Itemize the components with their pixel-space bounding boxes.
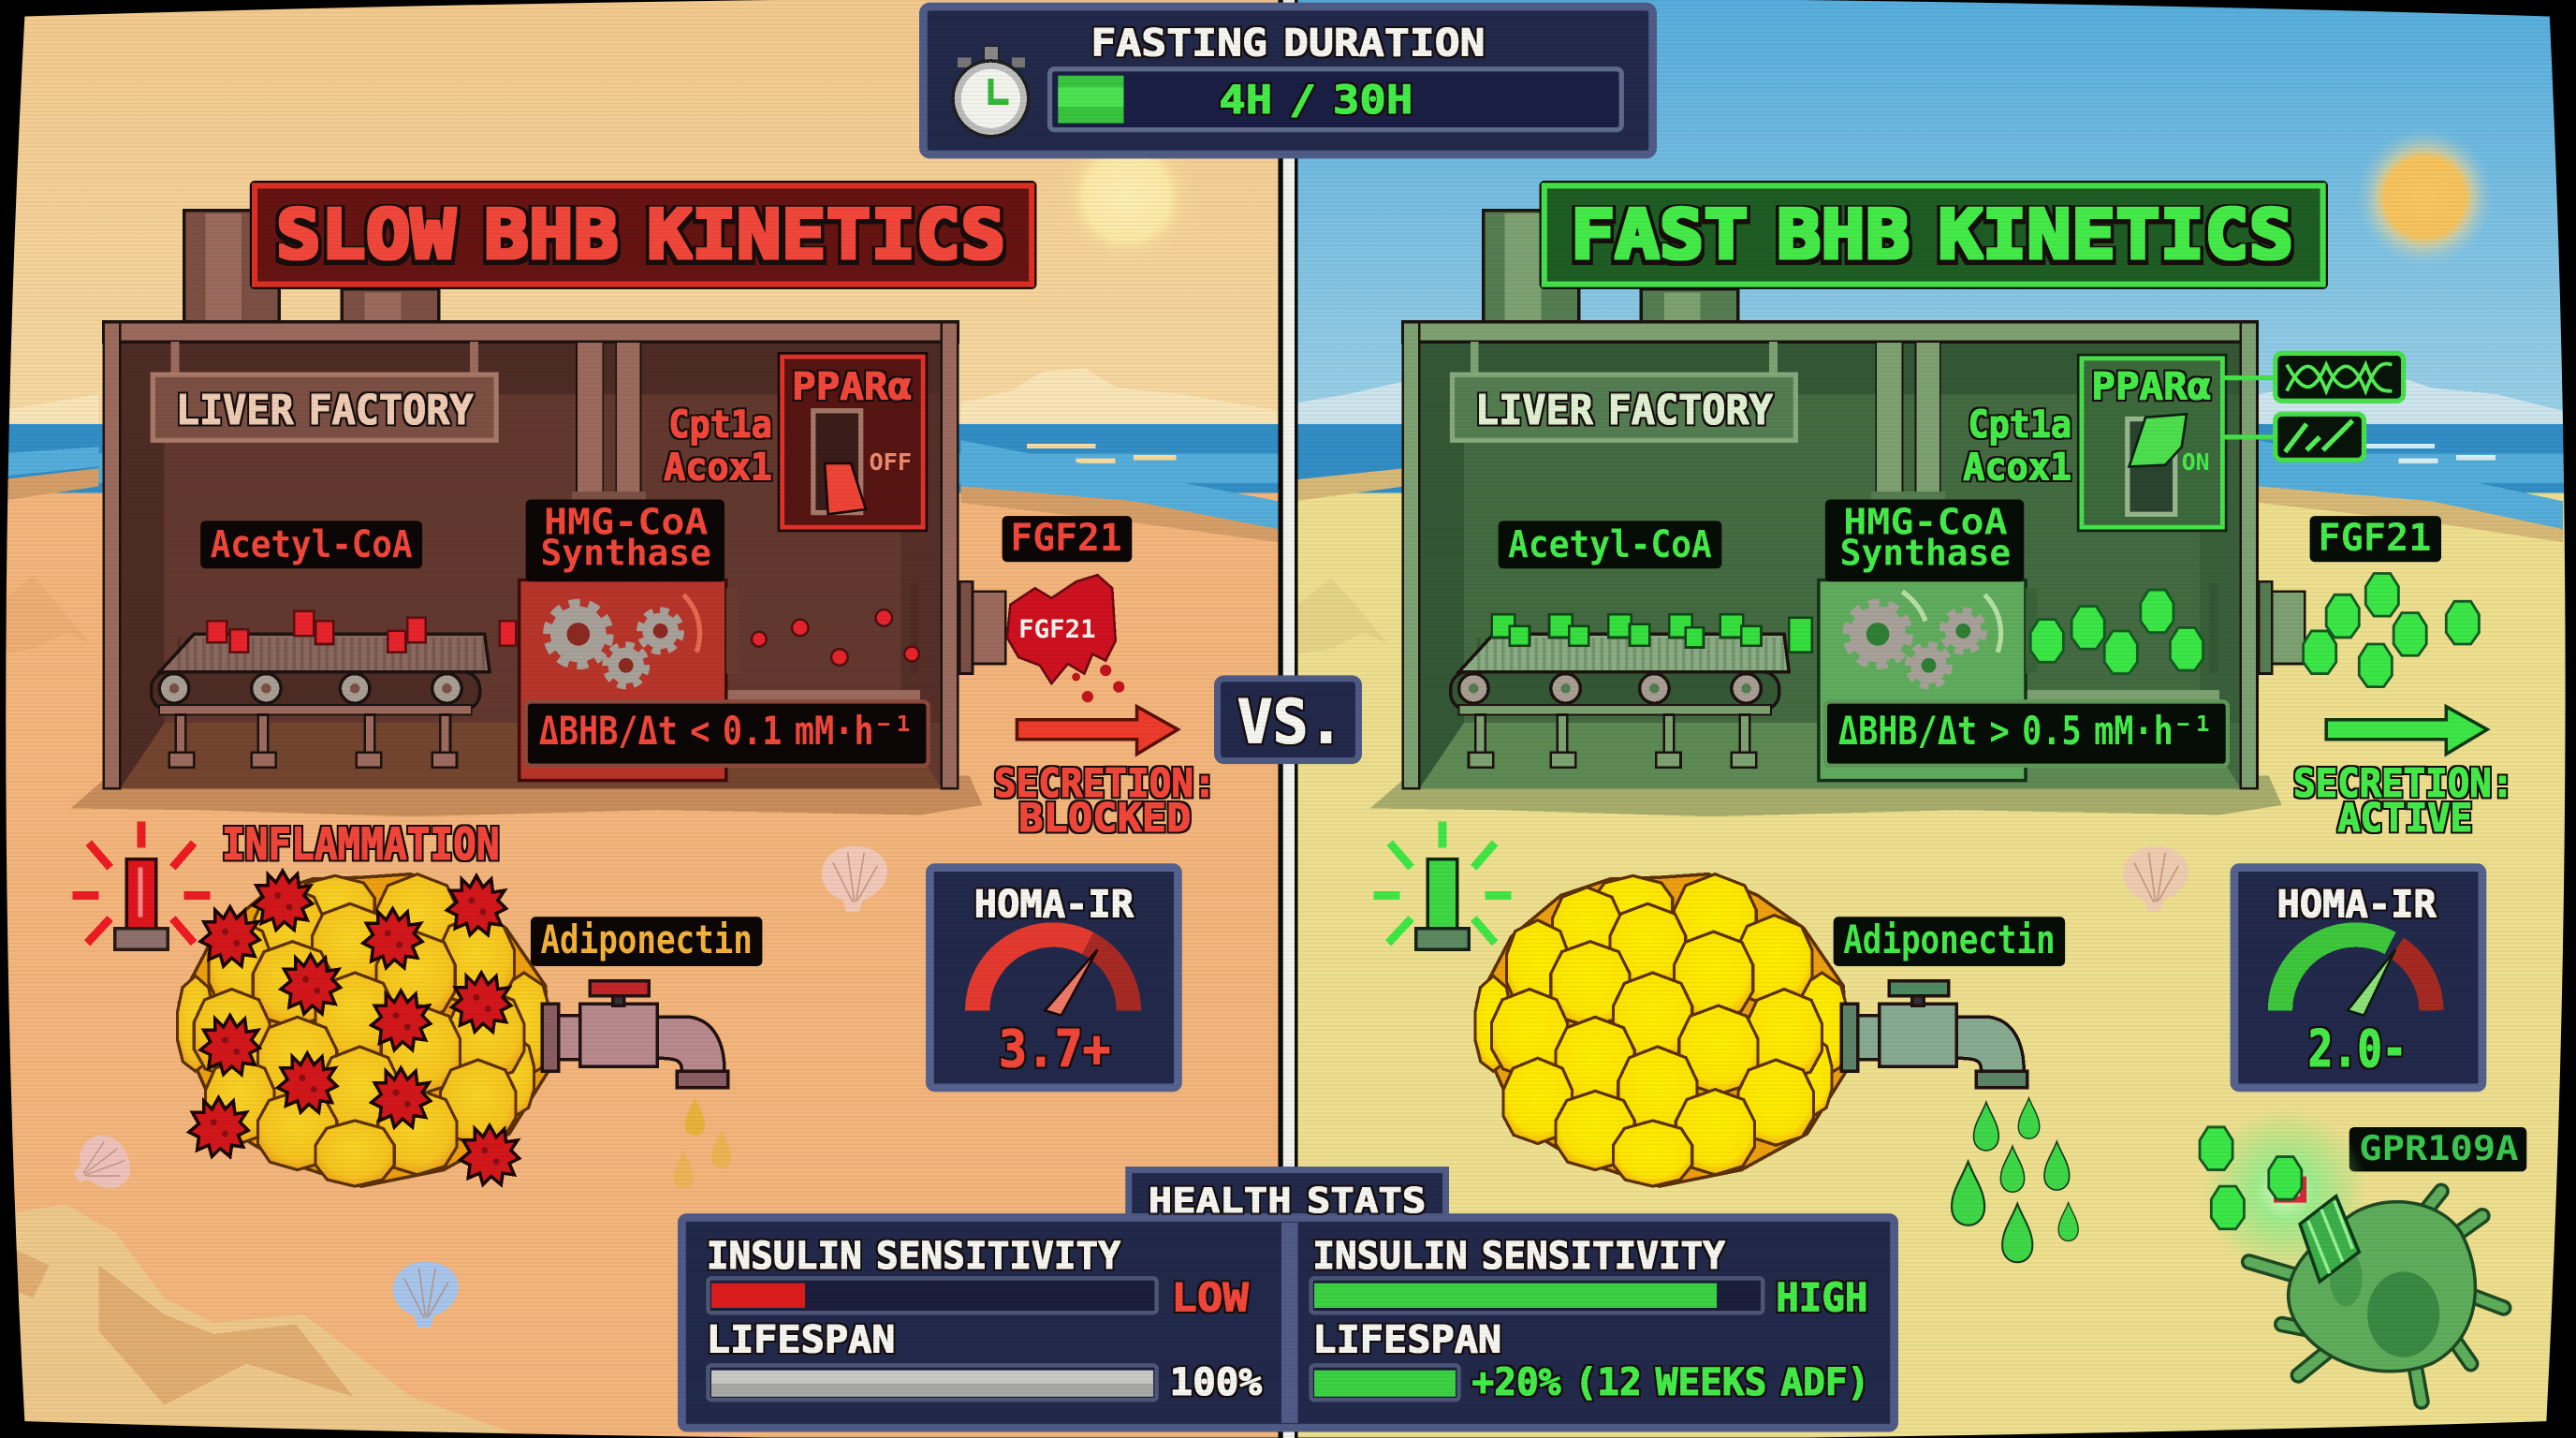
label: secretion active: ACTIVE: [2337, 795, 2472, 841]
stats: slow: 100%: [1170, 1360, 1263, 1404]
label: adiponectin left: Adiponectin: [540, 917, 753, 962]
switch: PPARα on: ON: [2182, 448, 2210, 476]
progress bar: 4H / 30H: [1219, 77, 1412, 123]
shells: [63, 846, 887, 1328]
droplets: blocked ketones: [752, 609, 919, 666]
machine: HMG-CoA synthase: [520, 500, 738, 781]
badge: trend arrows: [2224, 414, 2364, 460]
label: secretion active: [2293, 760, 2513, 841]
machine: HMG-CoA synthase: HMG-CoA: [544, 501, 708, 543]
drops: weak adiponectin: [674, 1097, 731, 1188]
switch: PPARα off: OFF: [869, 448, 912, 476]
sign: liver factory left: LIVER FACTORY: [176, 387, 474, 434]
stats: fast: +20% (12 WEEKS ADF): [1472, 1360, 1869, 1404]
cell: GPR109A immune cell: [2249, 1177, 2504, 1401]
label: adiponectin right: Adiponectin: [1843, 917, 2056, 962]
label: Cpt1a Acox1: Cpt1a: [668, 403, 772, 447]
label: Acetyl-CoA right: Acetyl-CoA: [1508, 522, 1712, 566]
fat cluster: healthy: [1475, 874, 1848, 1186]
splatter: blocked FGF21: FGF21: [1018, 616, 1096, 644]
label: secretion blocked: BLOCKED: [1018, 795, 1191, 841]
fat cluster: inflamed: [178, 871, 550, 1186]
machine: HMG-CoA synthase: Synthase: [540, 533, 711, 575]
acetyl-CoA cubes right: [1492, 614, 1812, 653]
tap: left: [542, 981, 728, 1088]
receptor: [2300, 1196, 2359, 1282]
label: secretion blocked: [994, 760, 1216, 841]
icon: stopwatch: [953, 46, 1029, 137]
label: inflammation: INFLAMMATION: [222, 819, 500, 871]
stats: fast: HIGH: [1776, 1275, 1868, 1321]
label: FGF21 right: FGF21: [2318, 516, 2431, 560]
pills: FGF21 released: [2304, 574, 2479, 687]
badge: DNA: [2224, 353, 2404, 401]
sign: liver factory left: [153, 374, 496, 440]
gauge panel: HOMA-IR right: HOMA-IR: [2277, 882, 2437, 926]
stats: fast: LIFESPAN: [1312, 1317, 1501, 1361]
panel: slow factory: [71, 211, 1005, 816]
label: Cpt1a Acox1: Acox1: [664, 445, 772, 489]
splatter: blocked FGF21: [1007, 575, 1124, 702]
pills: ketones flowing: [2030, 590, 2203, 674]
pills: BHB ligands: [2200, 1127, 2302, 1229]
stats: slow: INSULIN SENSITIVITY: [707, 1234, 1121, 1278]
label: Cpt1a Acox1 right: Acox1: [1963, 445, 2071, 489]
stats: slow: [707, 1234, 1263, 1404]
heading: slow: SLOW BHB KINETICS: [276, 196, 1005, 274]
shell right: [2123, 846, 2188, 912]
label: FGF21 left: FGF21: [1010, 516, 1122, 560]
switch: PPARα off: [779, 353, 927, 531]
alarm: red: [72, 822, 211, 949]
panel: health stats: [681, 1170, 1895, 1428]
readout: fast rate: [1825, 701, 2228, 766]
stats: fast: INSULIN SENSITIVITY: [1312, 1234, 1726, 1278]
viruses: [189, 871, 520, 1184]
label: secretion active: SECRETION:: [2293, 760, 2513, 806]
machine: HMG-CoA synthase right: HMG-CoA: [1843, 501, 2008, 543]
heading: fast: FAST BHB KINETICS: [1571, 196, 2293, 274]
readout: fast rate: ΔBHB/Δt > 0.5 mM·h⁻¹: [1838, 708, 2213, 754]
centre divider: [1278, 0, 1298, 1438]
label: GPR109A: GPR109A: [2359, 1128, 2519, 1168]
stats: slow: LOW: [1171, 1275, 1250, 1321]
machine: HMG-CoA synthase right: [1819, 500, 2037, 781]
title: fasting duration: FASTING DURATION: [1090, 22, 1486, 66]
sign: liver factory right: [1453, 374, 1795, 440]
stats: fast: [1311, 1234, 1869, 1404]
heading: fast: [1540, 181, 2328, 289]
gauge panel: HOMA-IR left: [929, 868, 1178, 1088]
label: secretion blocked: SECRETION:: [994, 760, 1216, 806]
readout: slow rate: [526, 701, 929, 766]
sign: liver factory right: LIVER FACTORY: [1475, 387, 1773, 434]
gauge panel: HOMA-IR left: 3.7+: [999, 1020, 1110, 1078]
readout: slow rate: ΔBHB/Δt < 0.1 mM·h⁻¹: [539, 708, 914, 754]
glow: receptor binding: [2203, 1109, 2367, 1273]
drops: adiponectin flowing: [1952, 1098, 2078, 1262]
progress bar: [1050, 69, 1621, 130]
label: Cpt1a Acox1 right: Cpt1a: [1969, 403, 2071, 447]
label: Cpt1a Acox1: [664, 403, 772, 489]
arrow: blocked secretion: [1017, 707, 1178, 755]
panel: fasting duration: [923, 7, 1653, 154]
label: Cpt1a Acox1 right: [1963, 403, 2071, 489]
alarm: green: [1373, 822, 1512, 949]
switch: PPARα off: PPARα: [792, 364, 912, 408]
tap: right: [1841, 981, 2027, 1088]
stats: slow: LIFESPAN: [707, 1317, 896, 1361]
badge: VS: VS.: [1237, 687, 1344, 757]
badge: VS: [1218, 679, 1358, 761]
switch: PPARα on: PPARα: [2091, 364, 2211, 408]
label: Acetyl-CoA: Acetyl-CoA: [211, 522, 413, 566]
gauge panel: HOMA-IR left: HOMA-IR: [974, 882, 1134, 926]
gauge panel: HOMA-IR right: 2.0-: [2308, 1020, 2407, 1078]
panel: fast factory: [1370, 211, 2305, 816]
arrow: active secretion: [2326, 707, 2487, 755]
background: left beach: [0, 0, 1281, 1438]
acetyl-CoA cubes: [207, 611, 516, 653]
background: right beach: [1295, 0, 2576, 1438]
title: health stats: HEALTH STATS: [1149, 1181, 1426, 1221]
switch: PPARα on: [2078, 355, 2226, 531]
heading: slow: [250, 181, 1036, 289]
machine: HMG-CoA synthase right: Synthase: [1840, 533, 2011, 575]
gauge panel: HOMA-IR right: [2234, 868, 2482, 1088]
